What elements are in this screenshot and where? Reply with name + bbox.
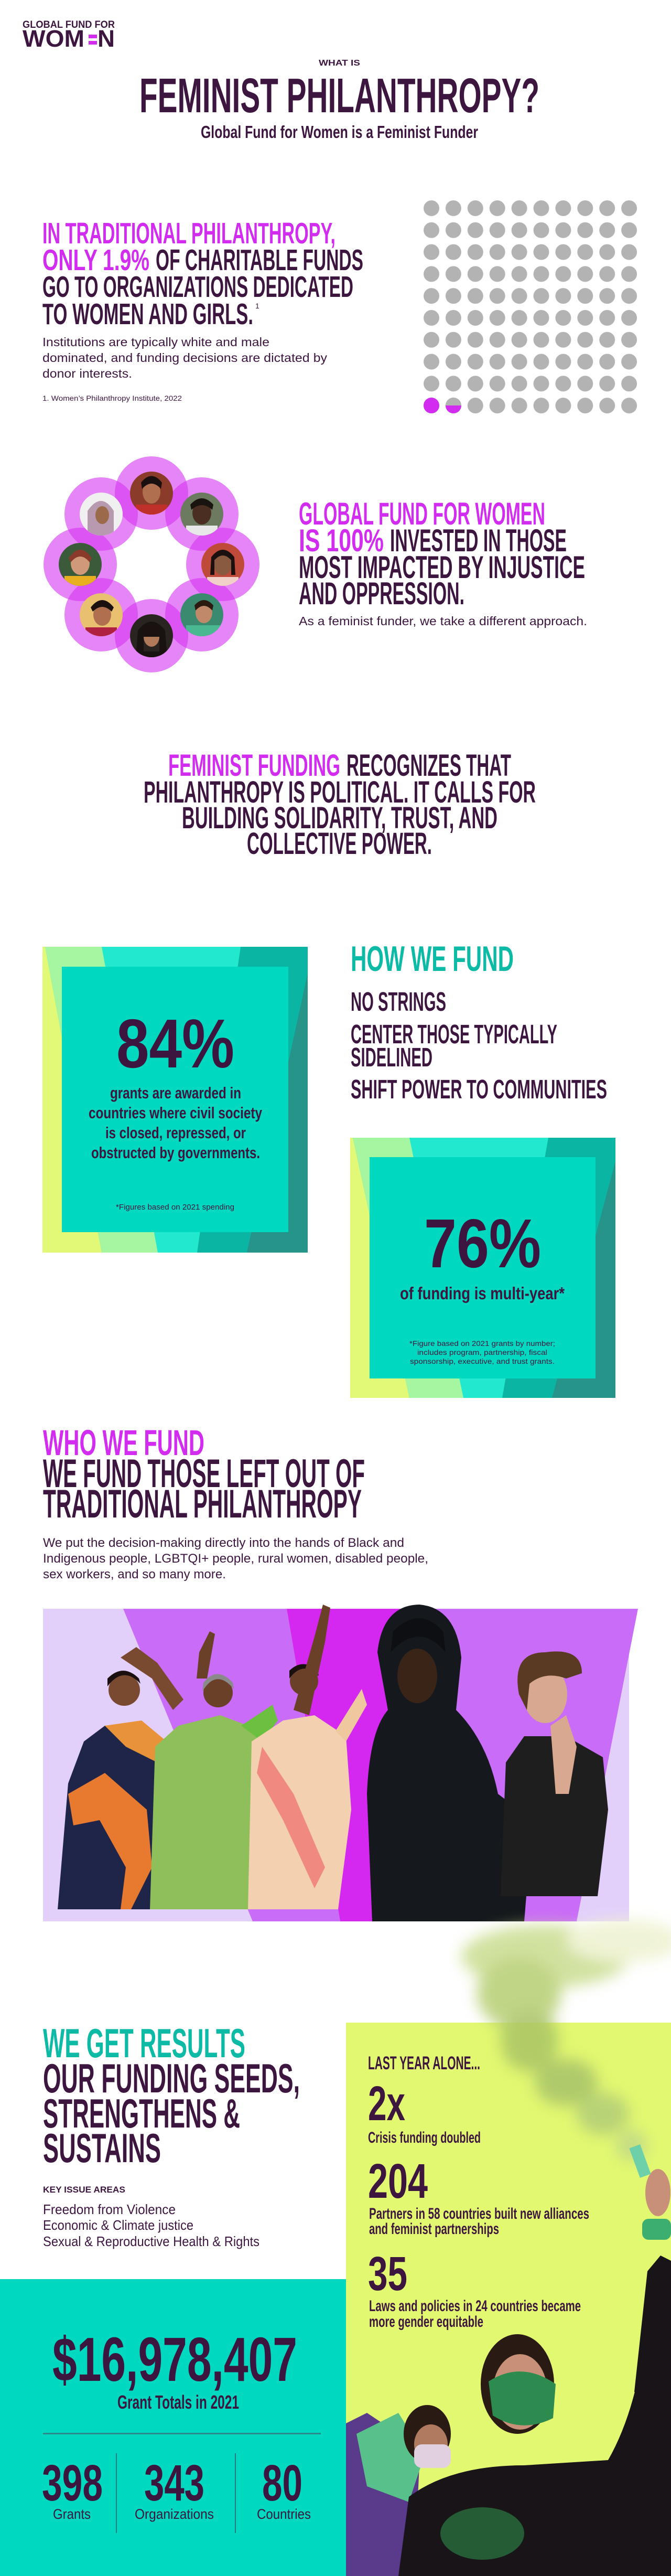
how we fund list: [351, 939, 607, 1104]
key issue areas: [43, 2185, 259, 2249]
last year stats: [368, 2053, 589, 2331]
heading: we get results: SUSTAINS: [43, 2125, 161, 2171]
portrait top-left: [80, 493, 123, 536]
card: 84%: *Figures based on 2021 spending: [116, 1203, 234, 1212]
portrait bottom-left: [80, 593, 123, 636]
logo: WOM: [23, 25, 84, 52]
card: 76%: includes program, partnership, fiscal: [417, 1348, 547, 1356]
results panel background (yellow): [346, 2023, 671, 2576]
body text: institutions: Institutions are typically white and male: [42, 335, 269, 349]
grant totals panel: $16,978,407: [52, 2325, 297, 2395]
statement: feminist funding: FEMINIST FUNDING: [168, 749, 340, 783]
body text: institutions: [42, 335, 328, 380]
key issue areas: Freedom from Violence: [43, 2201, 176, 2217]
heading: 100% invested: AND OPPRESSION.: [299, 576, 464, 611]
grant totals panel: 398: [42, 2454, 103, 2511]
body: who we fund: We put the decision-making directly into the hands of Black and: [43, 1536, 404, 1550]
card: 76%: *Figure based on 2021 grants by number;: [409, 1339, 555, 1348]
last year stats: LAST YEAR ALONE...: [368, 2053, 480, 2073]
photo collage: people we fund: [43, 1605, 638, 1921]
heading: we get results: [43, 2020, 300, 2171]
woman in black: [367, 1605, 533, 1921]
card: 76%: [350, 1138, 615, 1398]
how we fund list: SIDELINED: [351, 1042, 432, 1072]
portrait bottom-right: [180, 593, 223, 641]
protester photo: [346, 2144, 671, 2576]
key issue areas: Sexual & Reproductive Health & Rights: [43, 2233, 259, 2249]
stat heading: 1.9%: IN TRADITIONAL PHILANTHROPY,: [42, 217, 336, 250]
stat heading: 1.9%: 1: [255, 302, 259, 310]
logo: GLOBAL FUND FOR: [23, 19, 115, 30]
portrait top-right: [180, 493, 223, 536]
stat heading: 1.9%: OF CHARITABLE FUNDS: [156, 243, 363, 277]
portrait left: [59, 543, 102, 586]
statement: feminist funding: COLLECTIVE POWER.: [247, 827, 432, 861]
subtitle: Global Fund for Women is a Feminist Funder: [201, 122, 478, 142]
body text: institutions: dominated, and funding decisions are dictated by: [42, 351, 328, 365]
last year stats: 204: [368, 2154, 428, 2208]
heading: who we fund: TRADITIONAL PHILANTHROPY: [43, 1482, 362, 1526]
last year stats: 35: [368, 2247, 407, 2301]
body: different approach: As a feminist funder, we take a different approach.: [299, 614, 587, 628]
smoke: [461, 1920, 671, 2161]
card: 76%: sponsorship, executive, and trust grants.: [410, 1357, 555, 1365]
logo: N: [98, 25, 115, 52]
card: 84%: [42, 947, 308, 1253]
card: 76%: of funding is multi-year*: [400, 1284, 565, 1303]
key issue areas: KEY ISSUE AREAS: [43, 2185, 125, 2195]
dot chart: 1.9 of 100: [420, 197, 640, 416]
card: 76%: 76%: [424, 1205, 541, 1282]
body: who we fund: Indigenous people, LGBTQI+ people, rural women, disabled people,: [43, 1552, 428, 1566]
body: who we fund: [43, 1536, 428, 1581]
last year stats: more gender equitable: [369, 2313, 483, 2331]
body: who we fund: sex workers, and so many more.: [43, 1567, 226, 1581]
heading: we get results: WE GET RESULTS: [43, 2020, 245, 2066]
portrait top: [130, 472, 173, 515]
card: 84%: is closed, repressed, or: [105, 1124, 246, 1142]
statement: feminist funding: RECOGNIZES THAT: [347, 749, 511, 783]
portrait right: [201, 543, 244, 586]
card: 84%: countries where civil society: [89, 1104, 263, 1122]
heading: we get results: OUR FUNDING SEEDS,: [43, 2055, 300, 2101]
stat heading: 1.9%: GO TO ORGANIZATIONS DEDICATED: [42, 270, 353, 304]
logo: [23, 19, 115, 52]
grant totals panel: Organizations: [135, 2506, 214, 2522]
last year stats: Crisis funding doubled: [368, 2129, 481, 2146]
card: 84%: grants are awarded in: [110, 1084, 241, 1102]
women marching: [58, 1605, 367, 1909]
heading: who we fund: WHO WE FUND: [43, 1423, 204, 1463]
grant totals panel: [0, 2279, 346, 2576]
stat heading: 1.9%: ONLY 1.9%: [42, 243, 149, 277]
heading: 100% invested: [299, 496, 585, 611]
last year stats: 2x: [368, 2076, 405, 2131]
card: 84%: 84%: [116, 1005, 234, 1082]
heading: who we fund: [43, 1423, 365, 1526]
grant totals panel: Grants: [53, 2506, 91, 2522]
grant totals panel: Grant Totals in 2021: [117, 2391, 239, 2413]
heading: we get results: STRENGTHENS &: [43, 2090, 240, 2136]
stat heading: 1.9%: [42, 217, 363, 331]
grant totals panel: 343: [144, 2454, 204, 2511]
card: 84%: obstructed by governments.: [91, 1143, 260, 1162]
grant totals panel: 80: [262, 2454, 302, 2511]
grant totals panel: Countries: [257, 2506, 311, 2522]
eyebrow: what is: WHAT IS: [319, 59, 360, 68]
person on right: [501, 1651, 608, 1896]
how we fund list: HOW WE FUND: [351, 939, 514, 979]
statement: feminist funding: [144, 749, 536, 861]
photo ring: [44, 456, 259, 672]
body text: institutions: donor interests.: [42, 367, 132, 380]
last year stats: and feminist partnerships: [369, 2220, 499, 2238]
portrait bottom: [130, 614, 173, 657]
heading: 100% invested: IS 100%: [299, 523, 384, 558]
key issue areas: Economic & Climate justice: [43, 2217, 193, 2233]
heading: who we fund: WE FUND THOSE LEFT OUT OF: [43, 1451, 365, 1496]
stat heading: 1.9%: TO WOMEN AND GIRLS.: [42, 297, 253, 331]
footnote: 1. Women’s Philanthropy Institute, 2022: [42, 394, 182, 402]
how we fund list: NO STRINGS: [351, 987, 446, 1017]
